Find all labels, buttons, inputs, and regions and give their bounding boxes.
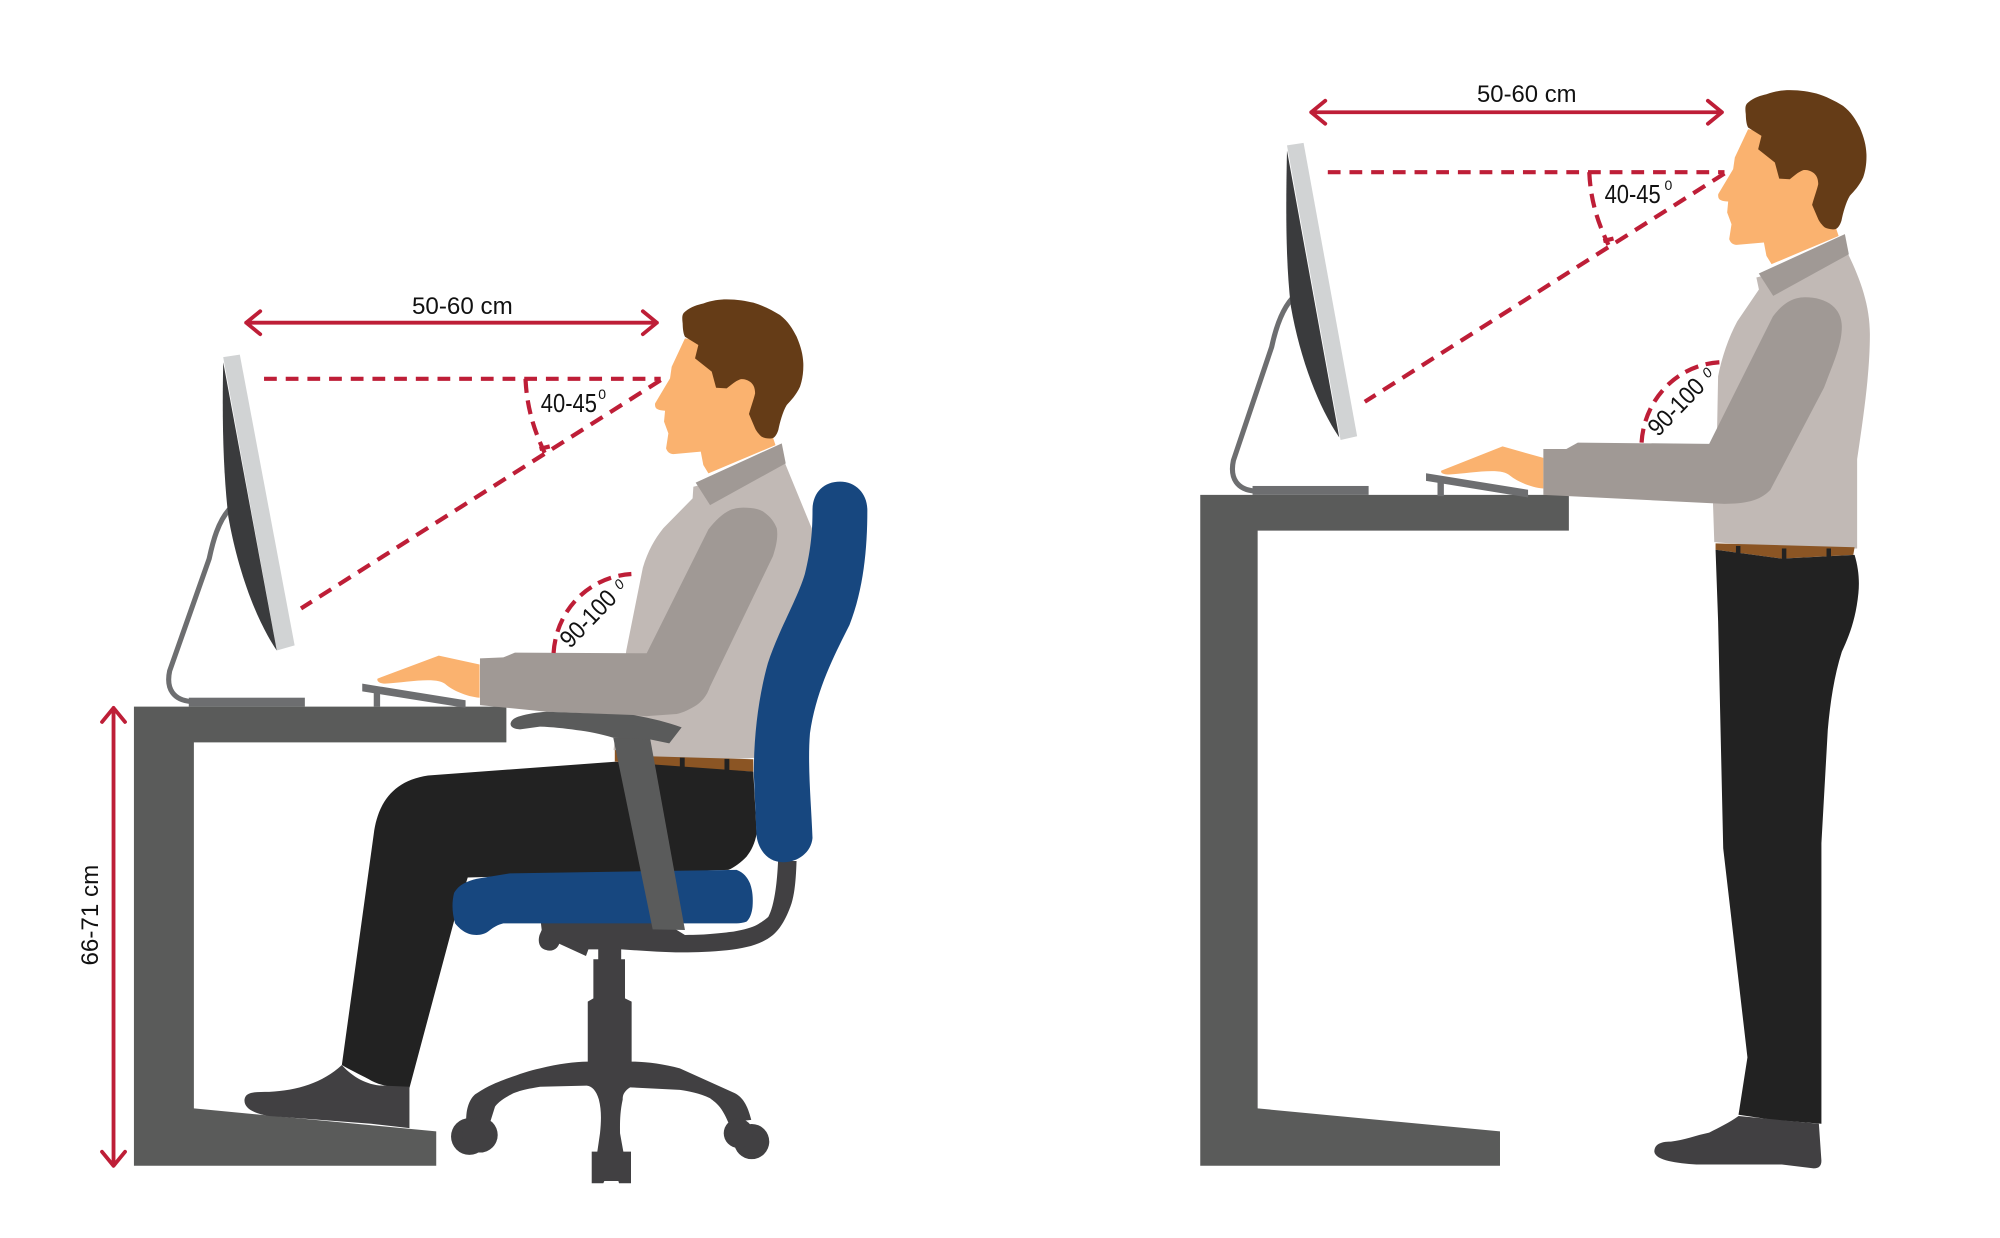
desk: sitting xyxy=(134,707,506,1166)
keyboard: standing xyxy=(1426,473,1528,497)
collar xyxy=(696,443,786,505)
dimension: viewing distance: 50-60 cm xyxy=(412,293,513,320)
chair: stem and base xyxy=(451,861,797,1183)
person: sitting xyxy=(244,299,816,1128)
dimension: viewing angle xyxy=(264,379,661,608)
arm: sleeve xyxy=(1543,297,1842,504)
face and neck xyxy=(655,338,776,473)
chair: armrest xyxy=(511,712,685,930)
torso shirt xyxy=(1713,254,1870,549)
shoe xyxy=(244,1065,409,1128)
collar xyxy=(1759,234,1849,296)
desk: standing xyxy=(1200,495,1569,1166)
keyboard: sitting xyxy=(362,684,466,708)
dimension: elbow angle: 0 xyxy=(1699,364,1716,381)
dimension: viewing angle: 0 xyxy=(598,386,606,402)
dimension: desk height xyxy=(77,708,125,1166)
arm: sleeve xyxy=(480,508,777,716)
dimension: elbow angle: 90-100 xyxy=(554,584,622,653)
dimension: viewing distance: 50-60 cm xyxy=(1477,81,1577,108)
belt xyxy=(1716,543,1855,560)
computer monitor: sitting xyxy=(169,355,305,707)
hand xyxy=(377,656,480,698)
dimension: viewing angle xyxy=(1328,172,1724,402)
hair xyxy=(682,299,803,438)
dimension: viewing distance xyxy=(1311,81,1722,124)
person: standing xyxy=(1441,90,1870,1168)
hair xyxy=(1745,90,1866,229)
computer monitor: standing xyxy=(1232,143,1369,495)
dimension: elbow angle: 90-100 xyxy=(1642,373,1710,442)
panel: standing posture xyxy=(1200,81,1870,1168)
dimension: elbow angle: 0 xyxy=(611,576,628,593)
chair: backrest xyxy=(754,482,867,862)
torso shirt xyxy=(614,463,816,759)
panel: sitting posture xyxy=(77,293,867,1183)
dimension: viewing angle: 40-45 xyxy=(1605,181,1661,209)
hand xyxy=(1441,446,1543,489)
dimension: viewing angle: 0 xyxy=(1665,177,1673,193)
shoe xyxy=(1654,1116,1821,1168)
chair: seat cushion xyxy=(452,870,753,935)
dimension: viewing angle: 40-45 xyxy=(541,390,597,418)
belt xyxy=(615,750,753,772)
dimension: viewing distance xyxy=(246,293,657,334)
face and neck xyxy=(1718,129,1839,264)
trousers xyxy=(342,762,757,1088)
dimension: desk height: 66-71 cm xyxy=(77,865,104,966)
trousers xyxy=(1716,550,1859,1124)
